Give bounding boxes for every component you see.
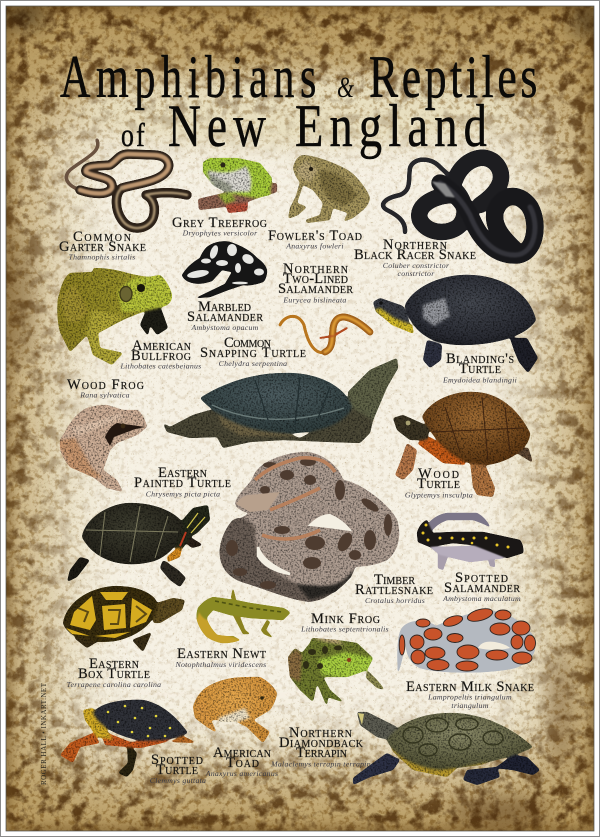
label: american bullfrog: Bullfrog bbox=[131, 348, 191, 364]
icon: eastern milk snake bbox=[397, 606, 536, 673]
species: northern two-lined salamander bbox=[278, 261, 370, 353]
label: eastern newt: Eastern Newt bbox=[177, 646, 266, 662]
label: northern two-lined salamander bbox=[278, 261, 353, 304]
label: grey treefrog: Dryophytes versicolor bbox=[182, 228, 258, 238]
icon: wood frog bbox=[60, 405, 147, 492]
species: grey treefrog bbox=[172, 158, 277, 238]
label: common garter snake: Thamnophis sirtalis bbox=[69, 252, 135, 262]
species: eastern milk snake bbox=[397, 606, 536, 710]
label: wood turtle bbox=[405, 466, 473, 500]
label: wood turtle: Wood bbox=[418, 466, 459, 482]
label: northern two-lined salamander: Two-Lined bbox=[283, 271, 348, 287]
species: blanding's turtle bbox=[373, 275, 538, 384]
label: eastern newt bbox=[175, 646, 266, 669]
label: eastern painted turtle: Painted Turtle bbox=[134, 475, 231, 491]
label: timber rattlesnake: Timber bbox=[374, 572, 415, 588]
label: american toad: Toad bbox=[226, 755, 259, 771]
species: northern diamondback terrapin bbox=[270, 712, 540, 785]
species: wood frog bbox=[60, 377, 147, 492]
label: spotted salamander: Spotted bbox=[455, 570, 508, 586]
label: marbled salamander: Ambystoma opacum bbox=[190, 323, 259, 332]
title: New bbox=[168, 93, 272, 159]
species: spotted salamander bbox=[417, 513, 523, 603]
label: northern diamondback terrapin: Malaclemys terrapin terrapin bbox=[270, 760, 371, 768]
title: Amphibians bbox=[60, 44, 322, 110]
species: marbled salamander bbox=[182, 241, 267, 332]
label: blanding's turtle: Turtle bbox=[459, 361, 501, 377]
species: american toad bbox=[193, 677, 278, 778]
label: fowler's toad: Fowler's Toad bbox=[268, 228, 362, 244]
label: common snapping turtle: Chelydra serpentina bbox=[219, 359, 287, 368]
icon: eastern newt bbox=[197, 588, 290, 643]
icon: two-lined salamander bbox=[280, 316, 370, 353]
label: blanding's turtle: Emydoidea blandingii bbox=[442, 376, 517, 384]
species: spotted turtle bbox=[60, 700, 206, 785]
label: northern black racer snake bbox=[354, 237, 476, 278]
icon: grey treefrog bbox=[198, 158, 277, 213]
label: northern black racer snake: Coluber constrictor bbox=[383, 261, 450, 270]
label: eastern milk snake: triangulum bbox=[451, 701, 489, 710]
label: spotted turtle: Turtle bbox=[156, 762, 198, 778]
label: spotted turtle bbox=[150, 752, 206, 785]
icon: spotted turtle bbox=[60, 700, 197, 777]
label: american bullfrog bbox=[120, 338, 201, 370]
label: spotted turtle: Spotted bbox=[151, 752, 203, 768]
icon: american bullfrog bbox=[57, 268, 172, 365]
icon: blanding's turtle bbox=[373, 275, 538, 373]
label: common garter snake: Garter Snake bbox=[59, 239, 146, 255]
label: timber rattlesnake: Crotalus horridus bbox=[365, 596, 425, 605]
label: eastern milk snake bbox=[406, 679, 534, 710]
label: common garter snake: Common bbox=[73, 229, 131, 245]
label: northern diamondback terrapin: Terrapin bbox=[296, 745, 347, 761]
icon: garter snake bbox=[66, 140, 187, 228]
icon: american toad bbox=[193, 677, 277, 743]
label: timber rattlesnake: Rattlesnake bbox=[355, 582, 433, 598]
species: eastern box turtle bbox=[63, 586, 185, 689]
label: mink frog: Lithobates septentrionalis bbox=[300, 624, 389, 634]
label: common snapping turtle: Snapping Turtle bbox=[200, 345, 306, 361]
label: mink frog bbox=[300, 611, 389, 634]
label: american bullfrog: Lithobates catesbeianus bbox=[120, 362, 201, 370]
label: common garter snake bbox=[59, 229, 146, 262]
title bbox=[60, 44, 541, 159]
label: eastern milk snake: Eastern Milk Snake bbox=[406, 679, 534, 695]
label: eastern milk snake: Lampropeltis triangulum bbox=[427, 692, 512, 702]
species: fowler's toad bbox=[268, 155, 370, 250]
species: common snapping turtle bbox=[160, 335, 398, 448]
icon: wood turtle bbox=[393, 392, 533, 497]
icon: marbled salamander bbox=[182, 241, 267, 298]
label: northern diamondback terrapin bbox=[270, 725, 371, 768]
label: blanding's turtle bbox=[442, 351, 517, 384]
label: fowler's toad: Anaxyrus fowleri bbox=[285, 242, 344, 250]
icon: timber rattlesnake bbox=[220, 452, 399, 602]
label: northern black racer snake: Northern bbox=[383, 237, 447, 253]
label: eastern box turtle: Box Turtle bbox=[78, 666, 150, 682]
label: eastern painted turtle: Eastern bbox=[158, 465, 207, 481]
label: eastern painted turtle: Chrysemys picta picta bbox=[146, 490, 220, 498]
label: eastern box turtle bbox=[67, 656, 161, 689]
label: spotted salamander: Ambystoma maculatum bbox=[442, 594, 521, 603]
label: spotted salamander: Salamander bbox=[444, 580, 520, 596]
label: eastern box turtle: Eastern bbox=[89, 656, 139, 672]
label: blanding's turtle: Blanding's bbox=[446, 351, 514, 367]
label: common snapping turtle bbox=[200, 335, 306, 368]
label: northern two-lined salamander: Northern bbox=[283, 261, 348, 277]
title: England bbox=[295, 93, 493, 159]
icon: black racer snake bbox=[383, 158, 535, 255]
label: american toad: American bbox=[213, 745, 271, 761]
species: wood turtle bbox=[393, 392, 533, 500]
species: common garter snake bbox=[59, 140, 187, 262]
icon: fowler's toad bbox=[288, 155, 370, 223]
label: northern black racer snake: constrictor bbox=[398, 269, 435, 278]
label: common snapping turtle: Common bbox=[224, 335, 271, 351]
label: marbled salamander bbox=[187, 299, 263, 332]
label: timber rattlesnake bbox=[355, 572, 433, 605]
label: grey treefrog: Grey Treefrog bbox=[172, 215, 267, 231]
label: northern two-lined salamander: Eurycea bislineata bbox=[282, 296, 347, 304]
label: northern diamondback terrapin: Diamondback bbox=[279, 735, 364, 751]
title: Reptiles bbox=[369, 44, 541, 110]
title: & bbox=[337, 71, 354, 104]
species: american bullfrog bbox=[57, 268, 201, 370]
label: northern black racer snake: Black Racer Snake bbox=[354, 247, 476, 263]
label: northern two-lined salamander: Salamander bbox=[278, 281, 353, 297]
species: eastern painted turtle bbox=[67, 465, 231, 587]
label: mink frog: Mink Frog bbox=[311, 611, 380, 627]
icon: snapping turtle bbox=[160, 358, 398, 448]
label: eastern painted turtle bbox=[134, 465, 231, 498]
label: wood frog: Rana sylvatica bbox=[79, 390, 130, 400]
label: wood frog: Wood Frog bbox=[67, 377, 144, 393]
label: american toad: Anaxyrus americanus bbox=[205, 769, 278, 778]
species: northern black racer snake bbox=[354, 158, 535, 278]
label: wood turtle: Turtle bbox=[417, 476, 460, 492]
species: timber rattlesnake bbox=[220, 452, 433, 605]
icon: spotted salamander bbox=[417, 513, 523, 572]
label: eastern box turtle: Terrapene carolina carolina bbox=[67, 680, 161, 689]
label: american toad bbox=[205, 745, 278, 778]
label: northern diamondback terrapin: Northern bbox=[289, 725, 352, 741]
icon: eastern box turtle bbox=[63, 586, 185, 652]
species: eastern newt bbox=[175, 588, 290, 669]
icon: mink frog bbox=[288, 638, 385, 707]
label: eastern newt: Notophthalmus viridescens bbox=[175, 660, 266, 669]
icon: diamondback terrapin bbox=[353, 712, 540, 785]
label: american bullfrog: American bbox=[132, 338, 191, 354]
label: spotted salamander bbox=[442, 570, 521, 603]
species: mink frog bbox=[288, 611, 389, 707]
credit: vertical artist line: ROGER HALL • INKART.NET bbox=[40, 682, 48, 785]
label: wood turtle: Glyptemys insculpta bbox=[405, 490, 473, 500]
label: marbled salamander: Marbled bbox=[198, 299, 251, 315]
label: spotted turtle: Clemmys guttata bbox=[150, 776, 206, 785]
title: of bbox=[121, 118, 147, 154]
label: marbled salamander: Salamander bbox=[187, 309, 263, 325]
icon: eastern painted turtle bbox=[67, 503, 210, 587]
